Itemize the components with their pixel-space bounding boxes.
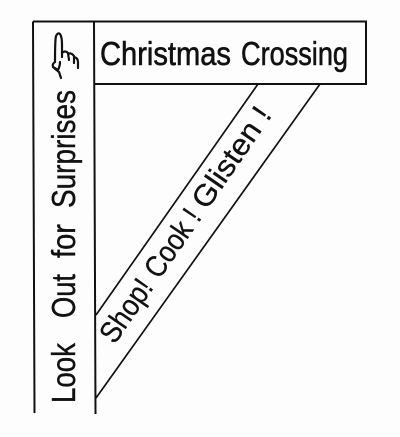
vertical label: Look Out for Surprises: for: [45, 224, 82, 258]
diagonal label: Shop! Cook! Glisten!: Shop!: [93, 273, 160, 349]
diagonal label: Shop! Cook! Glisten!: Glisten !: [185, 101, 278, 215]
icon: pointing hand: [53, 33, 78, 78]
diagonal label: Shop! Cook! Glisten!: [93, 101, 278, 349]
vertical label: Look Out for Surprises: Surprises: [45, 90, 82, 208]
vertical label: Look Out for Surprises: Out: [45, 274, 82, 318]
diagonal crossing band: [96, 84, 320, 398]
vertical label: Look Out for Surprises: [45, 90, 82, 403]
heading: Christmas Crossing: Crossing: [241, 35, 348, 72]
diagonal label: Shop! Cook! Glisten!: Cook !: [138, 203, 208, 284]
vertical label: Look Out for Surprises: Look: [45, 343, 82, 403]
heading: Christmas Crossing: [100, 35, 348, 72]
sign outline: post and top panel: [33, 22, 366, 414]
heading: Christmas Crossing: Christmas: [100, 35, 231, 72]
